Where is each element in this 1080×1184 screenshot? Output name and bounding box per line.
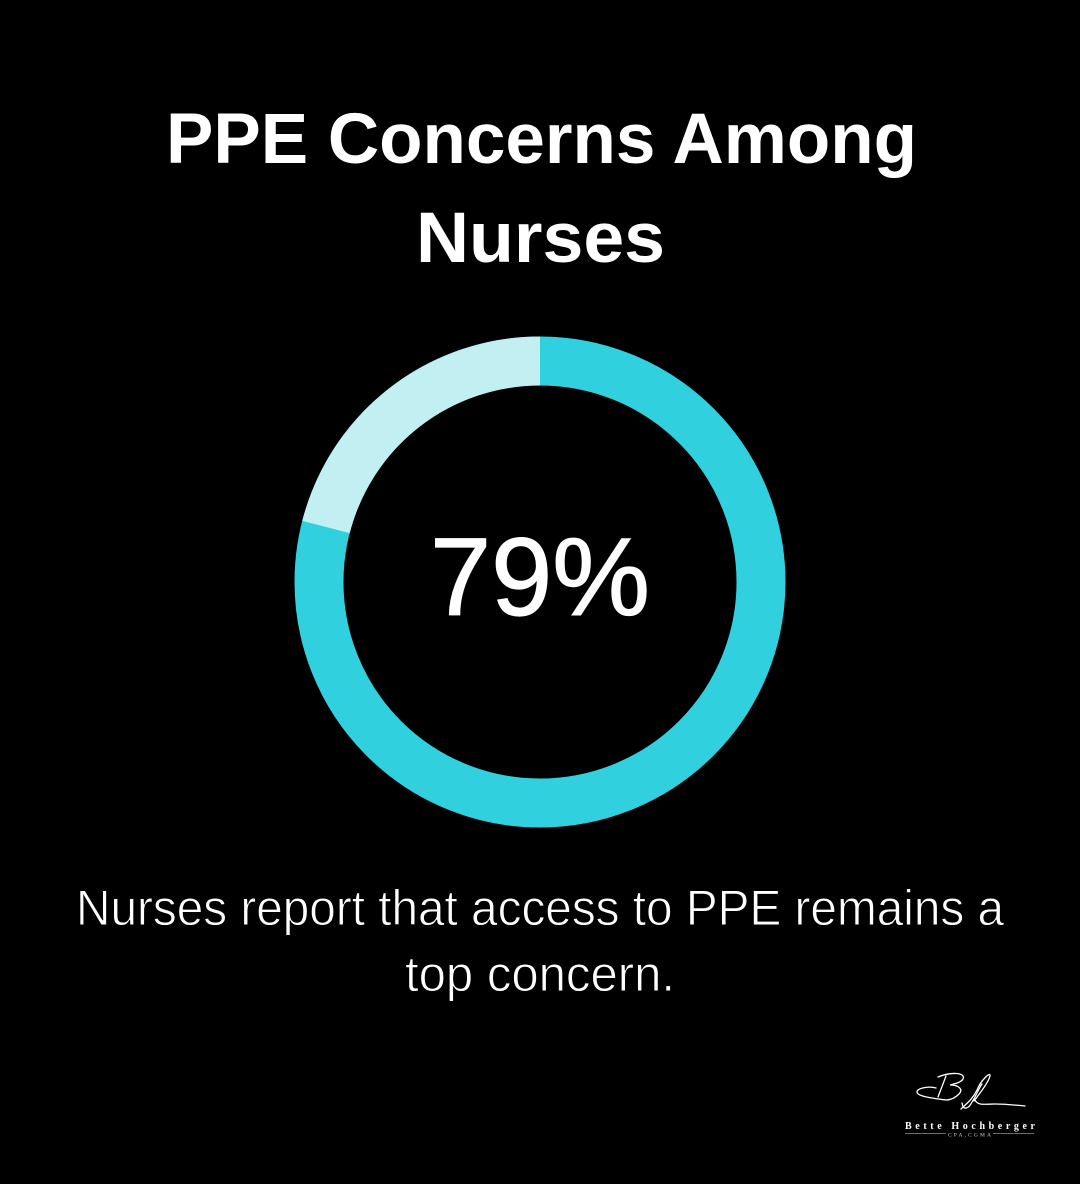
title: PPE Concerns Among (166, 100, 917, 179)
title (166, 100, 917, 278)
center value: 79% (430, 516, 650, 639)
description (76, 880, 1004, 1002)
logo credentials: CPA,CGMA (948, 1132, 991, 1138)
logo signature (917, 1073, 1025, 1109)
logo: Bette Hochberger (905, 1073, 1036, 1138)
logo name: Bette Hochberger (905, 1121, 1036, 1132)
description: Nurses report that access to PPE remains a (76, 880, 1004, 936)
donut chart: 79% (319, 361, 761, 803)
ring segment: 79 percent (319, 361, 761, 803)
description: top concern. (405, 946, 675, 1002)
title: Nurses (416, 199, 665, 278)
ring segment: remaining 21 percent (326, 361, 540, 527)
